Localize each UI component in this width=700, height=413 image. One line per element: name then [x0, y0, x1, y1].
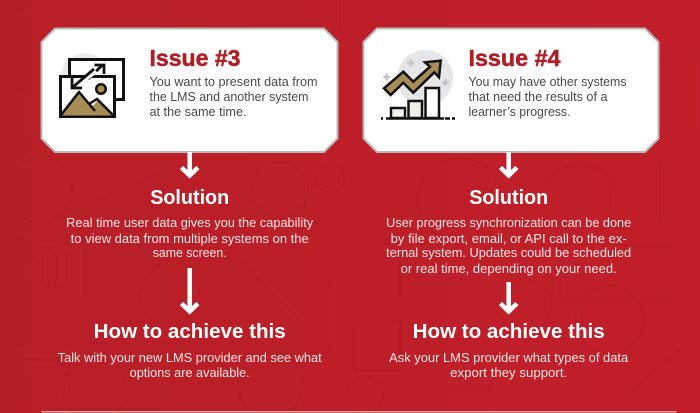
text: issue 3 description: You want to present data from [150, 75, 318, 89]
text: issue 3 description: at the same time. [150, 105, 246, 119]
text: solution right: ternal system. Updates could be scheduled [386, 246, 631, 260]
text: solution right: User progress synchronization can be done [386, 216, 631, 230]
text: issue 4 description [468, 75, 626, 119]
icon: pictures with sync arrows [60, 53, 124, 116]
panel: issue 3 card [42, 28, 338, 152]
text: solution left: to view data from multiple systems on the [71, 232, 309, 246]
arrow: issue 4 to solution [500, 152, 517, 176]
text: solution left [66, 216, 314, 260]
text: issue 3 description: the LMS and another system [150, 90, 308, 104]
text: how to achieve left: Talk with your new LMS provider and see what [58, 351, 322, 365]
heading: Issue #3: Issue #3 [150, 45, 240, 71]
icon: rising chart with arrow [381, 50, 455, 118]
text: solution left: same screen. [153, 246, 227, 260]
footer rule [42, 411, 676, 412]
arrow: solution to how right [500, 282, 517, 312]
heading: how to achieve left: How to achieve this [94, 320, 286, 343]
text: solution left: Real time user data gives you the capability [66, 216, 314, 230]
text: solution right: or real time, depending on your need. [401, 262, 617, 276]
text: solution right: by file export, email, or API call to the ex- [391, 232, 627, 246]
text: how to achieve left [58, 351, 322, 380]
heading: solution right: Solution [469, 187, 548, 209]
text: how to achieve right: export they support. [450, 366, 567, 380]
text: how to achieve right [389, 351, 628, 380]
arrow: issue 3 to solution [182, 152, 198, 176]
text: issue 4 description: You may have other systems [468, 75, 626, 89]
text: issue 3 description [150, 75, 318, 119]
heading: Issue #4: Issue #4 [468, 45, 561, 71]
text: how to achieve left: options are available. [130, 366, 250, 380]
heading: solution left: Solution [150, 187, 229, 209]
text: how to achieve right: Ask your LMS provider what types of data [389, 351, 628, 365]
text: issue 4 description: learner’s progress. [468, 105, 570, 119]
arrow: solution to how left [182, 268, 198, 312]
text: solution right [386, 216, 631, 276]
heading: how to achieve right: How to achieve this [413, 320, 605, 343]
text: issue 4 description: that need the results of a [468, 90, 608, 104]
panel: issue 4 card [364, 28, 658, 152]
